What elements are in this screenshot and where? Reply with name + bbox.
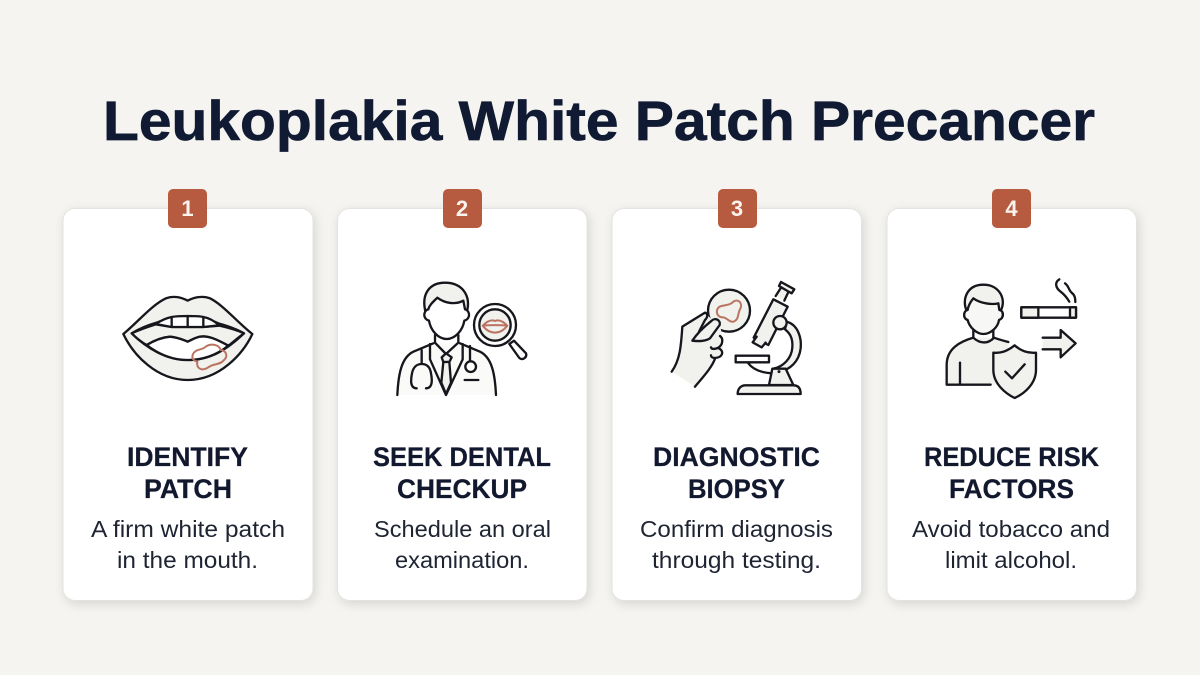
badge 4 xyxy=(992,189,1031,228)
body 1: A firm white patch xyxy=(91,516,285,542)
panel: step 4 reduce risk factors xyxy=(887,189,1136,600)
icon: hand with sample and microscope xyxy=(670,280,802,396)
badge 3 xyxy=(718,189,757,228)
icon: lips with patch xyxy=(122,296,254,382)
card 1 background xyxy=(63,208,313,600)
card 4 background xyxy=(887,208,1136,600)
badge 2 xyxy=(443,189,482,228)
badge 1: 1 xyxy=(181,196,194,221)
body 3: Confirm diagnosis xyxy=(640,516,833,542)
badge 2: 2 xyxy=(456,196,468,221)
icon: doctor with magnifier xyxy=(396,282,528,396)
heading 4: FACTORS xyxy=(949,474,1074,504)
panel: step 2 seek dental checkup xyxy=(338,189,587,600)
body 3 xyxy=(640,516,833,573)
badge 1 xyxy=(168,189,207,228)
heading 2: SEEK DENTAL xyxy=(373,442,551,472)
body 2: Schedule an oral xyxy=(374,516,551,542)
body 1 xyxy=(91,516,285,573)
body 2: examination. xyxy=(395,547,529,573)
body 4: Avoid tobacco and xyxy=(912,516,1110,542)
body 4 xyxy=(912,516,1110,573)
panel: step 1 identify patch xyxy=(63,189,313,600)
heading 3 xyxy=(653,442,820,504)
panel: step 3 diagnostic biopsy xyxy=(612,189,862,600)
body 3: through testing. xyxy=(652,547,821,573)
heading 4 xyxy=(924,442,1099,504)
icon: person, shield, cigarette and arrow xyxy=(946,278,1078,400)
heading 1: PATCH xyxy=(144,474,232,504)
heading 4: REDUCE RISK xyxy=(924,442,1099,472)
heading 3: DIAGNOSTIC xyxy=(653,442,820,472)
heading 1: IDENTIFY xyxy=(127,442,248,472)
body 1: in the mouth. xyxy=(117,547,258,573)
badge 4: 4 xyxy=(1005,196,1018,221)
heading 2: CHECKUP xyxy=(397,474,527,504)
heading 2 xyxy=(373,442,551,504)
badge 3: 3 xyxy=(731,196,743,221)
heading 1 xyxy=(127,442,248,504)
body 2 xyxy=(374,516,551,573)
body 4: limit alcohol. xyxy=(945,547,1077,573)
title: Leukoplakia White Patch Precancer xyxy=(103,89,1095,152)
card 3 background xyxy=(612,208,862,600)
card 2 background xyxy=(338,208,587,600)
heading 3: BIOPSY xyxy=(688,474,785,504)
